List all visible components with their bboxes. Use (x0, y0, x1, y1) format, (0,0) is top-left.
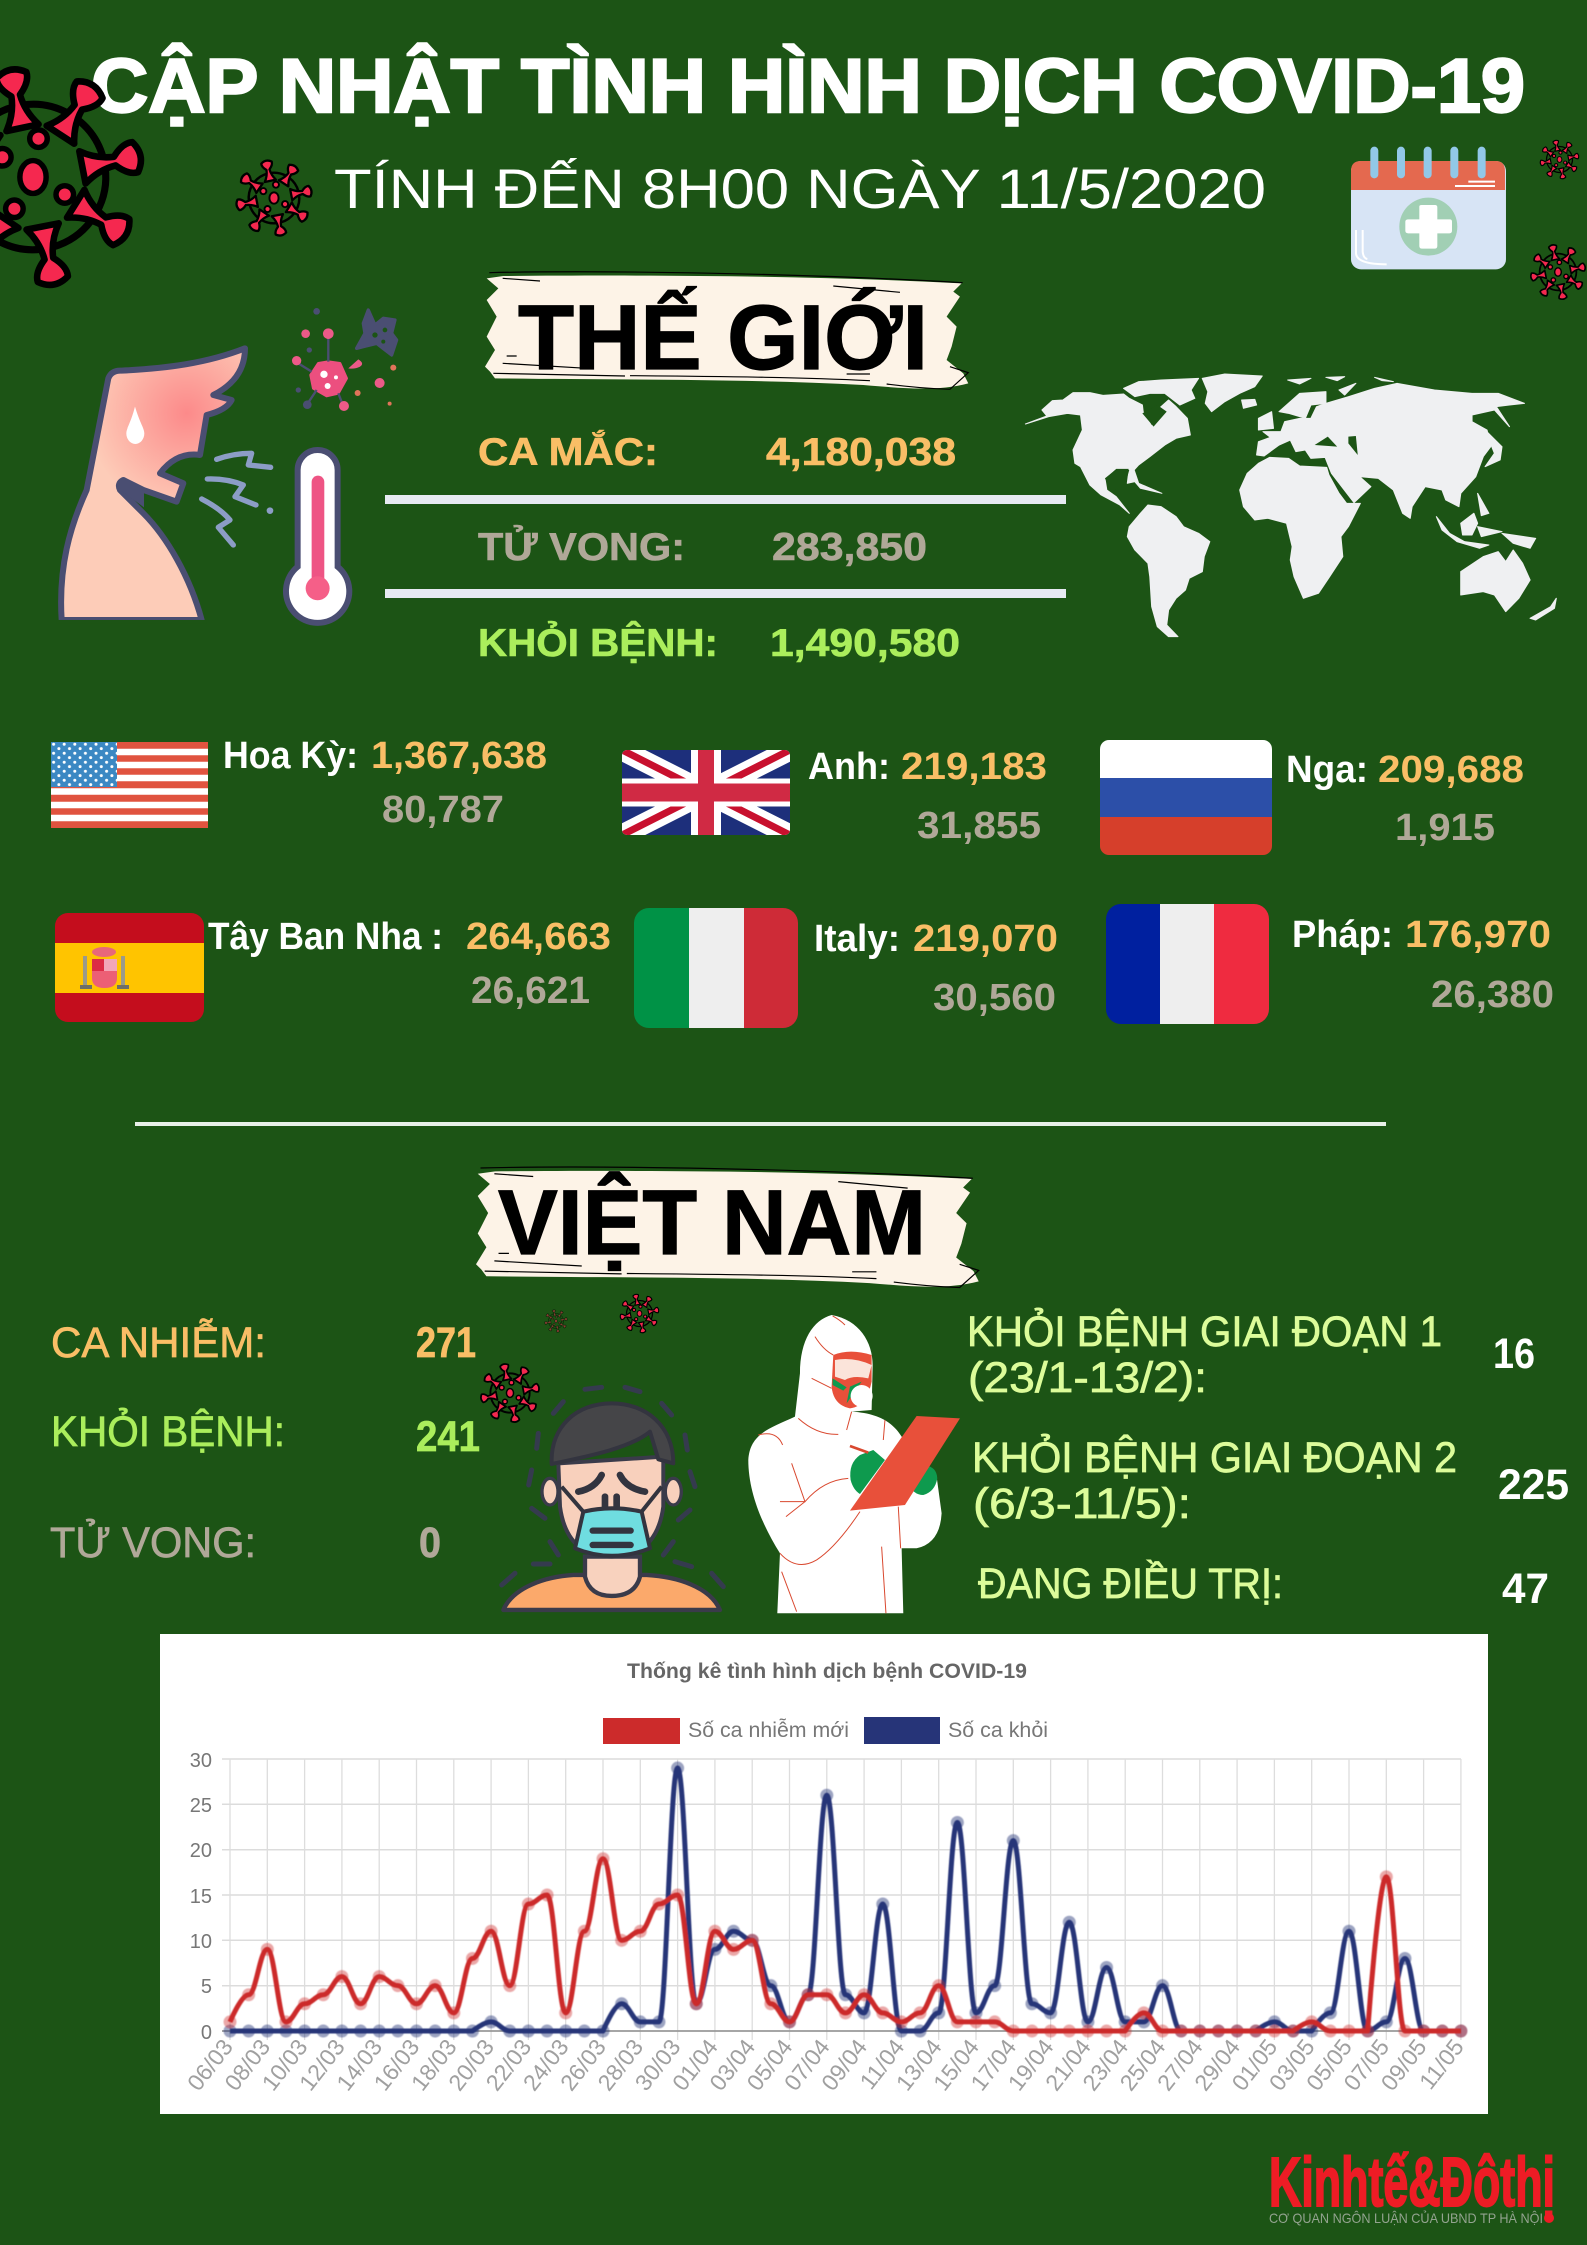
x axis labels: 05/04 (742, 2034, 798, 2095)
panel: Vietnam right stats (967, 1307, 1569, 1613)
protective suit (748, 1315, 942, 1613)
world map (1025, 374, 1556, 637)
country: Hoa Ky (223, 735, 547, 831)
stat: cases: CA MẮC: (478, 430, 658, 474)
y axis labels: 0 (201, 2022, 212, 2044)
thermometer (286, 450, 349, 623)
stat: recovered phase 1: KHỎI BỆNH GIAI ĐOẠN 1 (967, 1307, 1442, 1356)
x axis labels: 26/03 (555, 2034, 611, 2095)
x axis labels: 01/04 (667, 2034, 723, 2095)
x axis labels (182, 2034, 1469, 2095)
panel: line chart (160, 1634, 1488, 2114)
legend: Số ca khỏi (948, 1719, 1048, 1742)
stat: recovered: 1,490,580 (770, 622, 960, 665)
panel: Vietnam left stats (50, 1318, 480, 1567)
y axis labels: 15 (190, 1886, 212, 1908)
stat: deaths (50, 1518, 441, 1567)
stat: recovered phase 1: (23/1-13/2): (968, 1354, 1207, 1402)
person (61, 348, 245, 620)
germ cloud (292, 308, 397, 411)
glove fingers over clipboard (850, 1446, 868, 1453)
y axis labels: 30 (190, 1750, 212, 1772)
stat: recovered: KHỎI BỆNH: (51, 1407, 285, 1456)
country: Hoa Ky: Hoa Kỳ: (223, 735, 358, 777)
icon: large virus top left (0, 66, 144, 288)
stat: cases (478, 430, 956, 474)
body base (57, 620, 207, 624)
country: Tay Ban Nha: 26,621 (471, 970, 590, 1012)
stat: recovered phase 2 (972, 1433, 1457, 1528)
x axis labels: 22/03 (480, 2034, 536, 2095)
x axis labels: 12/03 (294, 2034, 350, 2095)
x axis labels: 14/03 (331, 2034, 387, 2095)
stat: deaths (478, 525, 927, 569)
icon: virus right (1530, 244, 1586, 300)
country: Anh: 31,855 (917, 805, 1041, 847)
value 16: 16 (1493, 1330, 1535, 1378)
stat: deaths: 283,850 (772, 526, 927, 569)
country: Tay Ban Nha: Tây Ban Nha : (208, 916, 443, 958)
series: recovered points (230, 1768, 1461, 2031)
x axis labels: 11/04 (854, 2034, 909, 2094)
x axis labels: 28/03 (592, 2034, 648, 2095)
value 47: 47 (1502, 1565, 1549, 1613)
x axis labels: 21/04 (1040, 2034, 1096, 2095)
y axis labels: 10 (190, 1931, 212, 1953)
stat: deaths: 0 (419, 1519, 441, 1567)
x axis labels: 01/05 (1226, 2034, 1282, 2095)
series: new cases points (230, 1859, 1461, 2031)
flag: United Kingdom (622, 750, 790, 835)
icon: small virus top right (1540, 140, 1579, 179)
country: Hoa Ky: 80,787 (382, 789, 504, 831)
stat: infected: 271 (416, 1319, 476, 1367)
flag: United States (51, 742, 208, 828)
country: Nga (1286, 749, 1524, 849)
x axis labels: 05/05 (1301, 2034, 1357, 2095)
icon: medical calendar (1351, 147, 1506, 269)
country: Hoa Ky: 1,367,638 (371, 735, 547, 777)
icon: small virus beside subtitle (236, 160, 312, 236)
x axis labels: 09/05 (1376, 2034, 1432, 2095)
flag: Russia (1100, 740, 1272, 855)
country: Italy: Italy: (814, 918, 900, 960)
heading text: VIỆT NAM (498, 1171, 926, 1274)
sweat drop (126, 407, 144, 444)
flag: Spain (55, 913, 204, 1022)
x axis labels: 24/03 (518, 2034, 574, 2095)
country: Nga: 1,915 (1395, 807, 1495, 849)
country: Phap: 176,970 (1405, 914, 1551, 956)
y axis labels (190, 1750, 212, 2044)
legend: Số ca nhiễm mới (688, 1719, 849, 1742)
flag: Italy (634, 908, 798, 1028)
icon: coughing person with thermometer (57, 308, 397, 624)
country: Tay Ban Nha: 264,663 (466, 916, 611, 958)
y axis labels: 20 (190, 1840, 212, 1862)
country: Phap (1292, 914, 1554, 1016)
icon: masked patient (502, 1387, 723, 1610)
x axis labels: 03/05 (1264, 2034, 1320, 2095)
country: Nga: 209,688 (1378, 749, 1524, 791)
stat: deaths: TỬ VONG: (50, 1518, 256, 1567)
value 225: 225 (1498, 1461, 1569, 1509)
stat: recovered: 241 (416, 1413, 480, 1461)
x axis labels: 20/03 (443, 2034, 499, 2095)
x axis labels: 29/04 (1189, 2034, 1245, 2095)
country: Nga: Nga: (1286, 749, 1368, 791)
cough lines (202, 453, 271, 545)
stat: recovered: KHỎI BỆNH: (478, 621, 718, 665)
y axis labels: 5 (201, 1976, 212, 1998)
x axis labels: 23/04 (1077, 2034, 1133, 2095)
stat: recovered phase 2: KHỎI BỆNH GIAI ĐOẠN 2 (972, 1433, 1457, 1482)
country: Anh (808, 746, 1047, 847)
country: Italy: 30,560 (933, 977, 1056, 1019)
series: new cases line (230, 1859, 1461, 2031)
stat: infected (51, 1318, 476, 1367)
data lines (230, 1768, 1461, 2031)
x axis labels: 07/04 (779, 2034, 835, 2095)
stat: deaths: TỬ VONG: (478, 525, 685, 569)
x axis labels: 13/04 (891, 2034, 947, 2095)
stat: infected: CA NHIỄM: (51, 1318, 266, 1367)
stat: recovered (478, 621, 960, 665)
x axis labels: 07/05 (1338, 2034, 1394, 2095)
x axis labels: 06/03 (182, 2034, 238, 2095)
y axis labels: 25 (190, 1795, 212, 1817)
x axis labels: 03/04 (704, 2034, 760, 2095)
x axis labels: 08/03 (219, 2034, 275, 2095)
stat: recovered phase 1 (967, 1307, 1442, 1402)
stat: recovered (51, 1407, 480, 1461)
neck shadow (118, 479, 144, 507)
x axis labels: 27/04 (1152, 2034, 1208, 2095)
country: Italy: 219,070 (913, 918, 1058, 960)
flag: France (1106, 904, 1269, 1024)
x axis labels: 30/03 (630, 2034, 686, 2095)
panel: country list (51, 735, 1554, 1028)
legend (603, 1717, 1048, 1744)
country: Phap: Pháp: (1292, 914, 1393, 956)
country: Italy (814, 918, 1058, 1019)
face and respirator (832, 1352, 872, 1408)
x axis labels: 10/03 (257, 2034, 313, 2095)
subtitle: TÍNH ĐẾN 8H00 NGÀY 11/5/2020 (334, 157, 1266, 220)
stat: cases: 4,180,038 (766, 431, 956, 474)
x axis labels: 16/03 (369, 2034, 424, 2095)
heading text: THẾ GIỚI (518, 286, 928, 389)
icon: doctor in protective suit (748, 1315, 960, 1613)
chart title: Thống kê tình hình dịch bệnh COVID-19 (627, 1660, 1027, 1683)
country: Anh: 219,183 (901, 746, 1047, 788)
country: Anh: Anh: (808, 746, 890, 788)
x axis labels: 18/03 (406, 2034, 462, 2095)
icon: viruses over patient (480, 1294, 659, 1423)
stat: recovered phase 2: (6/3-11/5): (973, 1480, 1191, 1528)
gloves (850, 1450, 885, 1494)
clipboard (850, 1416, 960, 1511)
x axis labels: 11/05 (1414, 2034, 1469, 2094)
title: CẬP NHẬT TÌNH HÌNH DỊCH COVID-19 (91, 43, 1525, 129)
x axis labels: 19/04 (1003, 2034, 1059, 2095)
country: Phap: 26,380 (1431, 974, 1554, 1016)
panel: world stats (385, 430, 1066, 665)
series: recovered line (230, 1768, 1461, 2031)
x axis labels: 17/04 (965, 2034, 1021, 2095)
x axis labels: 25/04 (1115, 2034, 1171, 2095)
heading: Viet Nam paper tag (476, 1167, 979, 1288)
dark germ (357, 310, 397, 355)
stat: under treatment: ĐANG ĐIỀU TRỊ: (978, 1560, 1283, 1608)
x axis labels: 15/04 (928, 2034, 984, 2095)
heading: The gioi paper tag (485, 272, 968, 389)
x axis labels: 09/04 (816, 2034, 872, 2095)
country: Tay Ban Nha (208, 916, 611, 1012)
logo tagline: CƠ QUAN NGÔN LUẬN CỦA UBND TP HÀ NỘI (1269, 2209, 1543, 2226)
